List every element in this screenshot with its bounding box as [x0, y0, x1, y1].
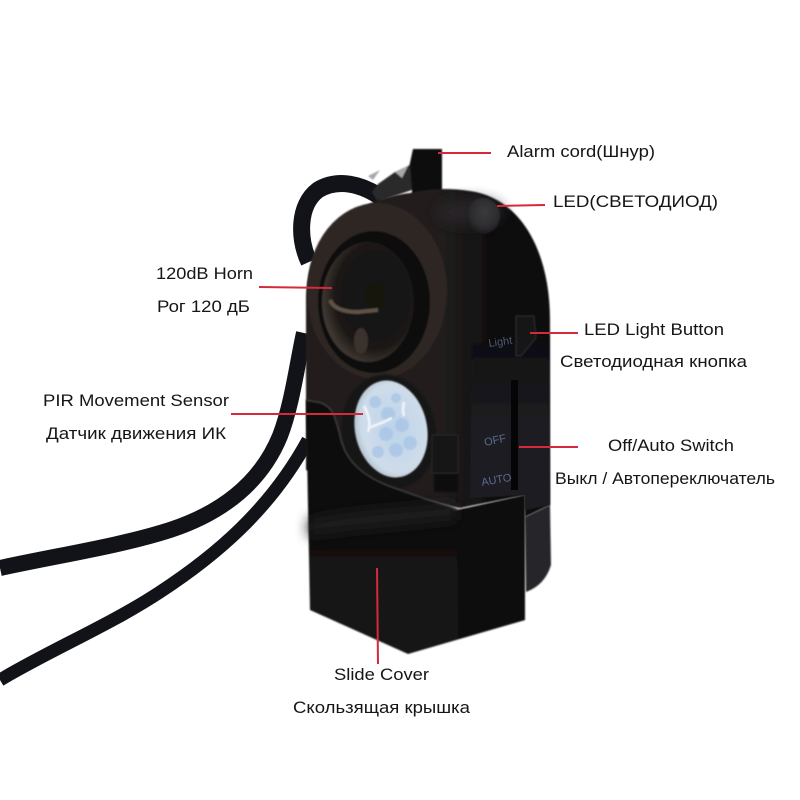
label: alarm cord: Alarm cord(Шнур) — [507, 143, 655, 161]
cover reflection — [308, 502, 457, 536]
horn dome — [322, 242, 414, 362]
label: LED light button — [560, 321, 748, 371]
label: horn — [156, 265, 253, 316]
label: horn: 120dB Horn — [156, 265, 253, 283]
label: PIR sensor: PIR Movement Sensor — [43, 392, 230, 410]
LED dome — [466, 198, 500, 234]
alarm cord plug — [368, 149, 442, 205]
label: PIR sensor — [43, 392, 230, 443]
side panel — [470, 335, 550, 510]
red leader lines — [231, 153, 578, 664]
label: slide cover — [293, 666, 471, 717]
rear housing tab — [525, 505, 551, 592]
switch slot — [511, 380, 518, 490]
slide cover — [306, 400, 525, 654]
label: off/auto switch: Off/Auto Switch — [608, 437, 734, 455]
upper shoulder — [436, 198, 504, 226]
label: PIR sensor: Датчик движения ИК — [46, 425, 226, 443]
lanyard cord — [0, 184, 382, 680]
off label: OFF — [483, 433, 507, 449]
label: off/auto switch: Выкл / Автопереключатель — [555, 470, 775, 488]
auto label: AUTO — [480, 472, 513, 489]
device — [306, 149, 551, 654]
label: slide cover: Slide Cover — [334, 666, 430, 684]
label: slide cover: Скользящая крышка — [293, 699, 471, 717]
horn ring — [307, 203, 447, 379]
main body — [306, 189, 550, 517]
PIR sensor lens — [346, 374, 436, 484]
slide switch — [432, 435, 458, 492]
label: LED: LED(СВЕТОДИОД) — [553, 193, 718, 211]
LED light button — [516, 316, 536, 356]
sensor recess — [331, 365, 447, 499]
label: LED light button: LED Light Button — [584, 321, 724, 339]
label: horn: Рог 120 дБ — [157, 298, 250, 316]
light label: Light — [488, 335, 513, 350]
label: off/auto switch — [555, 437, 775, 488]
label: LED light button: Светодиодная кнопка — [560, 353, 748, 371]
